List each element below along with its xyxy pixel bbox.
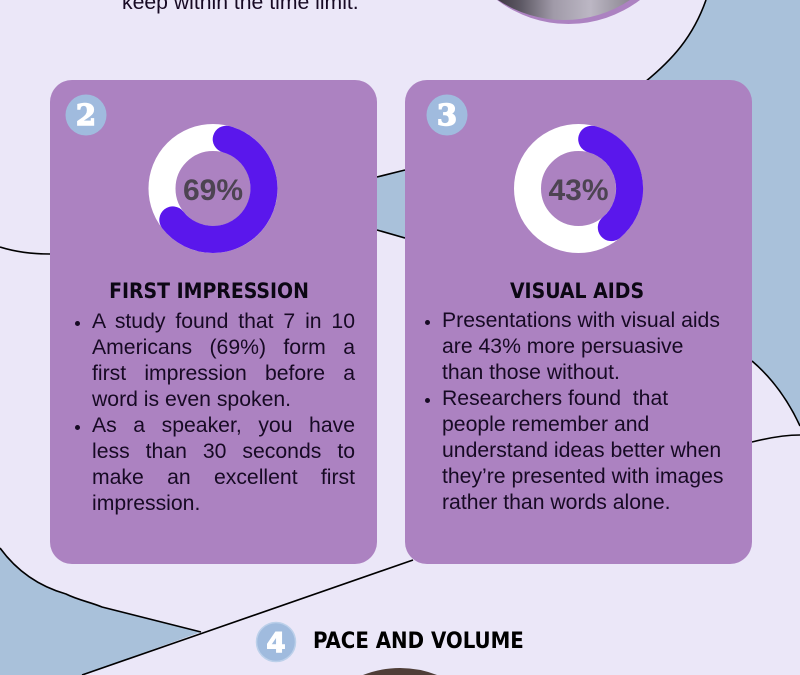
heading: visual aids: VISUAL AIDS [510,279,644,303]
bullet list: first impression [75,310,356,515]
bullet list: first impression: first impression before a [92,362,355,385]
heading: pace and volume: PACE AND VOLUME [313,629,524,654]
bullet list: visual aids: Presentations with visual aids [442,309,720,332]
bullet list: visual aids: are 43% more persuasive [442,335,683,358]
bullet list: first impression: less than 30 seconds to [92,440,355,463]
donut chart: 43% [514,124,644,253]
bullet list: first impression: Americans (69%) form a [92,336,355,359]
bullet list: first impression: word is even spoken. [92,388,291,411]
donut chart: 43%: 43% [548,174,609,207]
badge: number 4: 4 [266,626,286,659]
bullet list: visual aids: understand ideas better when [442,439,721,462]
photo: top circle crop [497,0,640,24]
heading: first impression: FIRST IMPRESSION [109,279,309,303]
panel: visual aids [405,80,752,564]
bullet list: visual aids: than those without. [442,361,620,384]
bullet list: visual aids: people remember and [442,413,649,436]
badge: number 2 [66,94,106,136]
badge: number 2: 2 [76,98,96,132]
donut chart: 69% [148,124,278,253]
bullet list: visual aids: they’re presented with images [442,465,723,488]
bullet list: visual aids: rather than words alone. [442,491,670,514]
badge: number 4 [256,622,296,662]
bullet list: visual aids [425,309,723,514]
bullet list: visual aids: Researchers found that [442,387,668,410]
bullet list: first impression: A study found that 7 in 10 [92,310,355,333]
badge: number 3 [426,94,468,136]
bullet list: first impression: impression. [92,492,200,515]
bullet list: first impression: make an excellent first [92,466,355,489]
panel: first impression [50,80,377,564]
badge: number 3: 3 [437,98,457,132]
donut chart: 69%: 69% [183,174,243,207]
bullet list: first impression: As a speaker, you have [92,414,355,437]
